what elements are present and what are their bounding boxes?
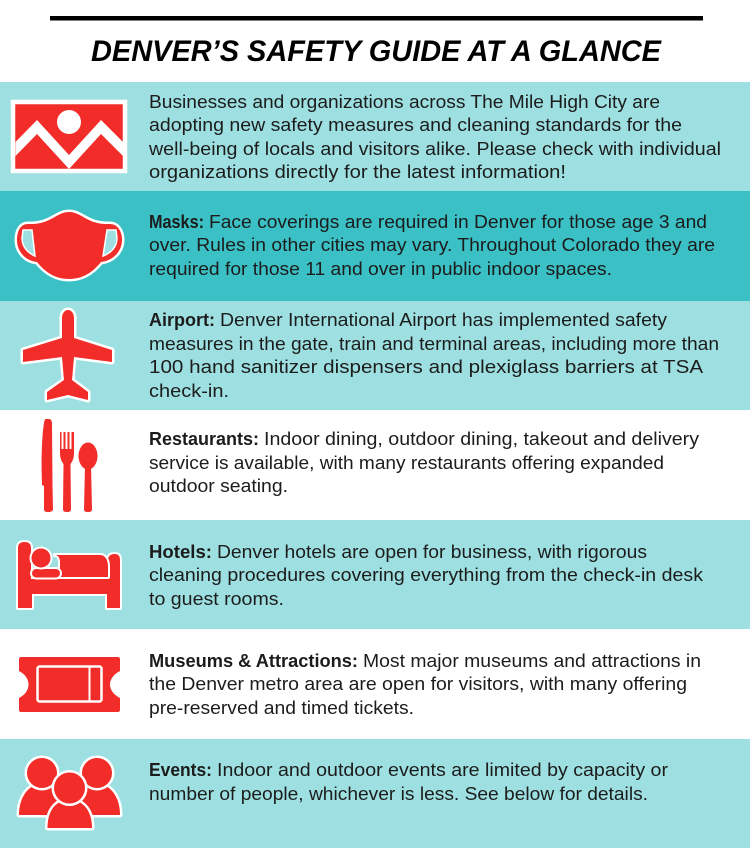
- icon: face mask: [17, 212, 122, 279]
- airport text: Airport:: [149, 310, 215, 330]
- masks text: Masks:: [149, 212, 204, 232]
- icon: ticket: [19, 657, 120, 712]
- restaurants text: outdoor seating.: [149, 476, 288, 496]
- panel: museums: [0, 629, 750, 739]
- hotels text: to guest rooms.: [149, 589, 284, 609]
- hotels text: Hotels:: [149, 542, 212, 562]
- airport text: Denver International Airport has implemented safety: [220, 310, 667, 330]
- masks text: over. Rules in other cities may vary. Throughout Colorado they are: [149, 235, 715, 255]
- panel: events: [0, 739, 750, 848]
- airport text: check-in.: [149, 381, 229, 401]
- events text: Indoor and outdoor events are limited by capacity or: [217, 760, 668, 780]
- panel: restaurants: [0, 410, 750, 520]
- masks text: Face coverings are required in Denver for those age 3 and: [209, 212, 707, 232]
- museums text: Most major museums and attractions in: [363, 651, 701, 671]
- events text: number of people, whichever is less. See below for details.: [149, 784, 648, 804]
- hotels text: cleaning procedures covering everything from the check-in desk: [149, 565, 704, 585]
- panel: intro: [0, 82, 750, 191]
- icon: mountains: [13, 102, 125, 171]
- restaurants text: Indoor dining, outdoor dining, takeout and delivery: [264, 429, 699, 449]
- airport text: measures in the gate, train and terminal areas, including more than: [149, 334, 719, 354]
- museums text: the Denver metro area are open for visitors, with many offering: [149, 674, 687, 694]
- title: DENVER’S SAFETY GUIDE AT A GLANCE: [91, 35, 662, 68]
- title rule: [50, 16, 703, 20]
- panel: masks: [0, 191, 750, 301]
- masks text: required for those 11 and over in public indoor spaces.: [149, 259, 612, 279]
- intro text: adopting new safety measures and cleaning standards for the: [149, 115, 682, 135]
- restaurants text: Restaurants:: [149, 429, 259, 449]
- restaurants text: service is available, with many restaurants offering expanded: [149, 453, 664, 473]
- museums text: pre-reserved and timed tickets.: [149, 698, 414, 718]
- hotels text: Denver hotels are open for business, with rigorous: [217, 542, 647, 562]
- intro text: Businesses and organizations across The Mile High City are: [149, 92, 660, 112]
- icon: bed: [18, 542, 120, 608]
- icon: cutlery: [42, 419, 98, 512]
- airport text: 100 hand sanitizer dispensers and plexiglass barriers at TSA: [149, 357, 703, 377]
- intro text: well-being of locals and visitors alike. Please check with individual: [148, 139, 721, 159]
- intro text: organizations directly for the latest information!: [149, 162, 566, 182]
- museums text: Museums & Attractions:: [149, 651, 358, 671]
- panel: hotels: [0, 520, 750, 629]
- icon: people: [19, 758, 120, 828]
- events text: Events:: [149, 760, 212, 780]
- panel: airport: [0, 301, 750, 410]
- icon: airplane: [23, 310, 112, 400]
